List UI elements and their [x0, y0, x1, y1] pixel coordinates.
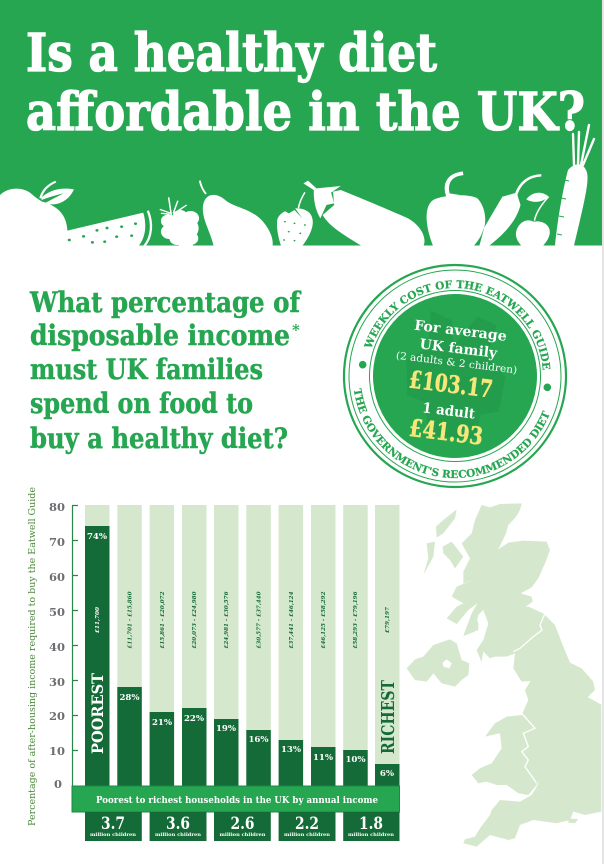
y axis: 20: [49, 709, 65, 723]
title: [26, 23, 585, 143]
y axis: 10: [49, 744, 65, 758]
icon: pear: [200, 181, 273, 246]
y axis: [49, 500, 78, 791]
children count boxes: 2.2: [295, 814, 319, 834]
y axis: 60: [49, 570, 65, 584]
title: Is a healthy diet: [26, 23, 437, 84]
percentage labels: 28%: [119, 693, 140, 703]
y axis: 80: [49, 500, 65, 514]
income range labels: £15,861 - £20,072: [160, 591, 166, 648]
y-axis title: Percentage of after-housing income required to buy the Eatwell Guide: [28, 487, 38, 826]
y axis: 70: [49, 535, 65, 549]
bar backgrounds: [85, 505, 400, 786]
income range labels: £46,125 - £58,292: [321, 591, 327, 648]
income range labels: £11,701 - £15,860: [128, 591, 134, 648]
badge centre text: For average: [413, 318, 508, 345]
heading: what percentage: disposable income: [30, 319, 290, 352]
circular badge: weekly cost: [342, 264, 568, 488]
children count boxes: million children: [90, 832, 136, 838]
y axis: 50: [49, 605, 65, 619]
bar values: [85, 526, 400, 786]
x-axis band: Poorest to richest households in the UK by annual income: [96, 795, 378, 806]
badge centre text: 1 adult: [421, 400, 476, 423]
income range labels: £30,577 - £37,440: [256, 591, 262, 648]
percentage labels: 10%: [345, 755, 366, 765]
food silhouettes: [0, 173, 550, 246]
icon: strawberry: [277, 192, 313, 246]
children count boxes: million children: [220, 832, 266, 838]
percentage labels: 21%: [152, 718, 172, 728]
y axis: 0: [54, 777, 62, 791]
map of the UK: [407, 503, 601, 847]
icon: aubergine: [303, 181, 425, 246]
badge centre text: £41.93: [408, 413, 485, 451]
y axis: 40: [49, 640, 65, 654]
income range labels: £20,073 - £24,980: [192, 591, 198, 648]
income range labels: £11,700: [95, 607, 101, 633]
poorest label: POOREST: [88, 673, 107, 754]
income range labels: £24,981 - £30,576: [224, 591, 230, 648]
badge centre text: [386, 316, 522, 454]
heading: what percentage: *: [292, 321, 300, 339]
percentage labels: 11%: [313, 753, 333, 763]
income range labels: £37,441 - £46,124: [289, 591, 295, 648]
badge centre text: (2 adults & 2 children): [395, 351, 518, 376]
icon: raspberry: [160, 197, 199, 246]
heading: what percentage: [29, 286, 302, 455]
income range labels: £79,197: [385, 607, 391, 633]
income range labels: £58,293 - £79,196: [353, 591, 359, 648]
percentage labels: 22%: [184, 714, 204, 724]
percentage labels: 6%: [380, 769, 394, 779]
badge dots: [358, 360, 552, 392]
icon: cherry: [516, 193, 550, 246]
x-axis band: [72, 786, 400, 812]
icon: chilli: [479, 175, 541, 246]
badge centre text: £103.17: [408, 365, 494, 404]
percentage labels: 19%: [216, 724, 236, 734]
children count boxes: million children: [348, 832, 394, 838]
children count boxes: 3.7: [101, 814, 125, 834]
richest label: RICHEST: [379, 680, 399, 754]
heading: what percentage: buy a healthy diet?: [30, 422, 288, 455]
badge arc text: bottom: THE GOVERNMENT'S RECOMMENDED DIET: [354, 388, 550, 478]
percentage labels: [87, 532, 394, 779]
icon: pepper: [427, 173, 485, 246]
icon: carrot: [555, 125, 594, 246]
percentage labels: 13%: [281, 745, 301, 755]
children count boxes: [85, 812, 400, 841]
y axis: 30: [49, 675, 65, 689]
icon: watermelon: [58, 211, 151, 246]
percentage labels: 74%: [87, 532, 107, 542]
children count boxes: million children: [284, 832, 330, 838]
bar chart: [28, 487, 400, 841]
children count boxes: 2.6: [230, 814, 254, 834]
income range labels: [95, 591, 391, 648]
heading: what percentage: must UK families: [30, 353, 263, 386]
children count boxes: 1.8: [359, 814, 383, 834]
heading: what percentage: What percentage of: [29, 286, 302, 319]
children count boxes: million children: [155, 832, 201, 838]
icon: family silhouette: [398, 308, 512, 444]
heading: what percentage: spend on food to: [30, 387, 253, 420]
children count boxes: 3.6: [166, 814, 190, 834]
percentage labels: 16%: [248, 735, 269, 745]
badge arc text: top: WEEKLY COST OF THE EATWELL GUIDE: [364, 280, 550, 370]
header banner: [0, 0, 602, 246]
icon: apple: [0, 182, 74, 246]
badge centre text: UK family: [419, 337, 499, 362]
